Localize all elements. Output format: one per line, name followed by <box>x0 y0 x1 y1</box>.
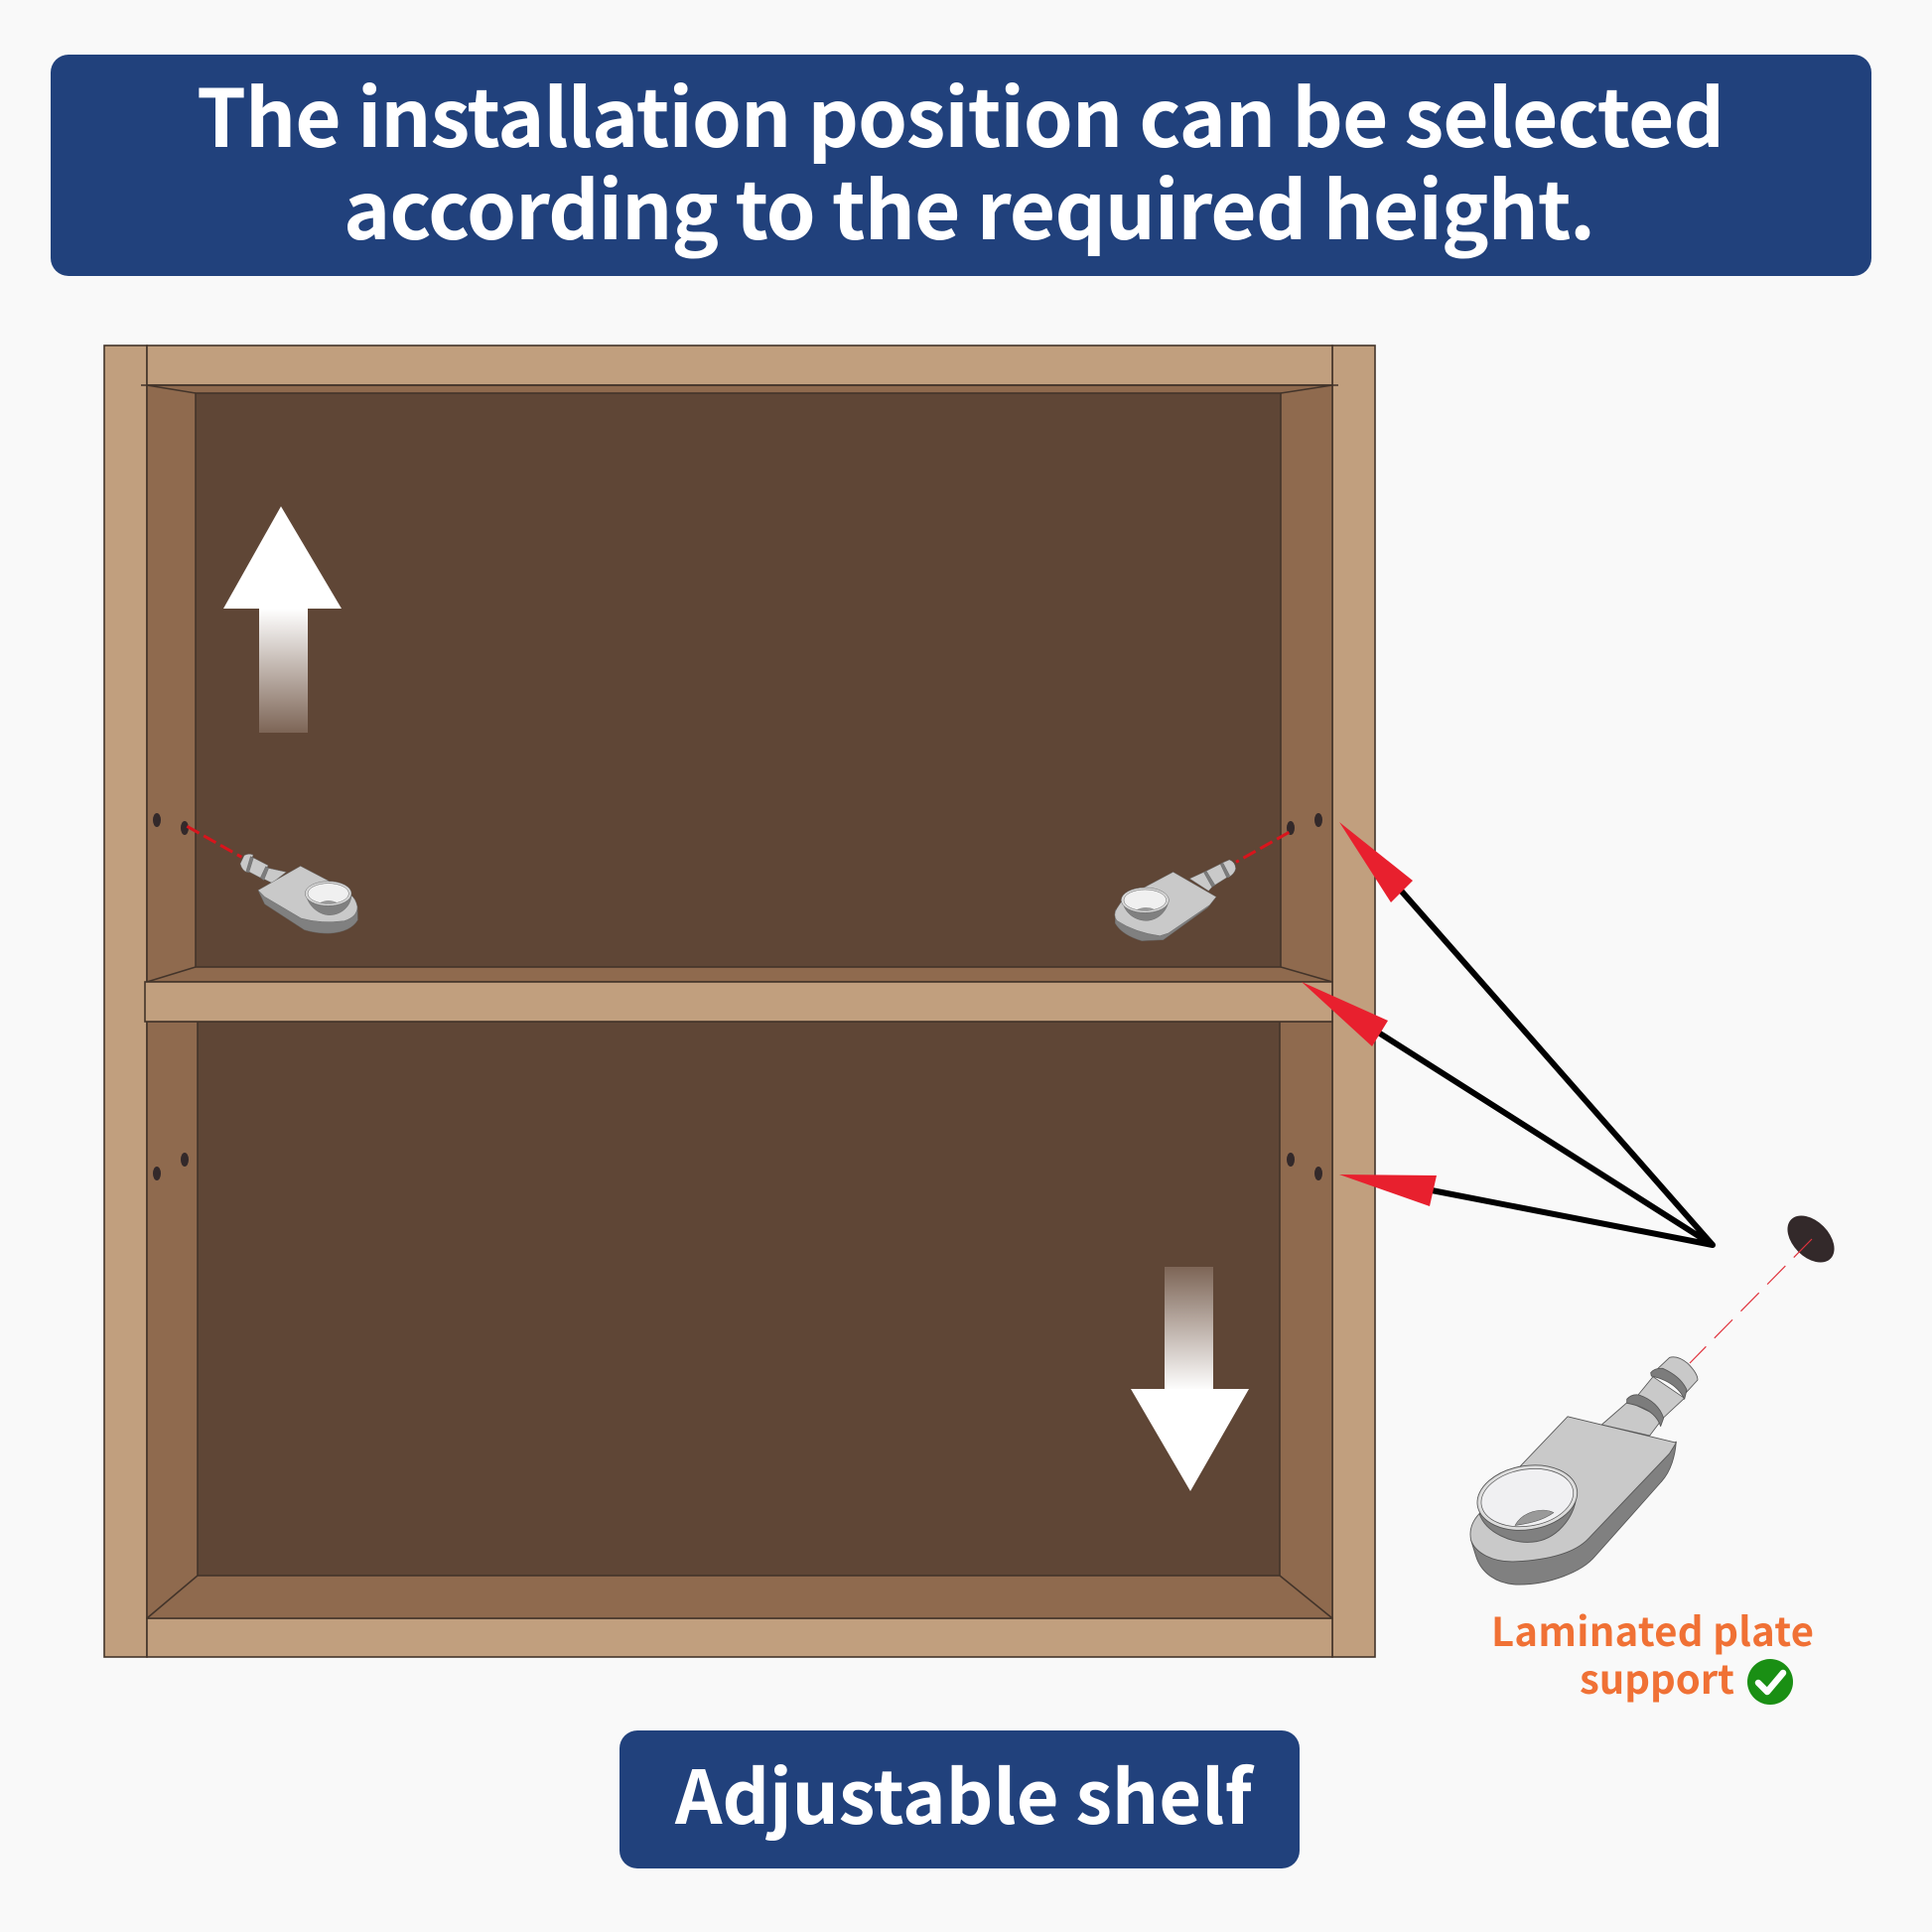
title banner: according to the required height. <box>344 148 1595 263</box>
title banner <box>51 55 1871 276</box>
down arrow <box>1131 1267 1249 1491</box>
callout arrows <box>1302 822 1713 1245</box>
right side panel <box>1332 345 1375 1657</box>
product label <box>1491 1600 1814 1706</box>
icon: right shelf support <box>1115 832 1289 941</box>
icon: left shelf support <box>187 826 357 933</box>
icon: green check <box>1747 1659 1793 1705</box>
product label: support <box>1580 1648 1734 1706</box>
up arrow <box>223 506 342 733</box>
bottom banner: adjustable shelf: Adjustable shelf <box>674 1739 1254 1846</box>
arrowhead bottom <box>1339 1174 1437 1206</box>
bottom banner: adjustable shelf <box>620 1730 1300 1868</box>
arrowhead top <box>1339 822 1413 902</box>
pin hole enlarged <box>1778 1206 1844 1272</box>
top board <box>147 345 1332 385</box>
cabinet <box>104 345 1375 1657</box>
left side panel <box>104 345 147 1657</box>
icon: enlarged shelf support <box>1470 1239 1812 1585</box>
lower compartment interior <box>147 1022 1332 1618</box>
product label: Laminated plate <box>1491 1600 1814 1658</box>
upper compartment interior <box>141 385 1338 982</box>
shelf pin holes <box>153 813 1322 1180</box>
title text: The installation position can be selected <box>197 56 1725 171</box>
bottom board <box>147 1618 1332 1657</box>
adjustable shelf board <box>145 982 1332 1022</box>
arrowhead middle <box>1302 982 1388 1046</box>
